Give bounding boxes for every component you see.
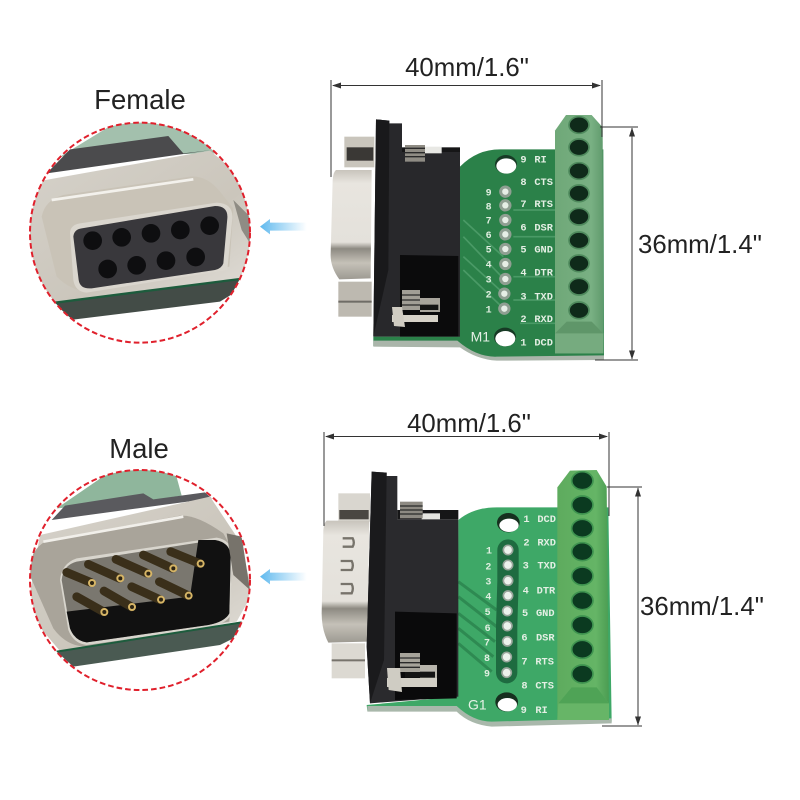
infographic canvas (29, 57, 763, 727)
terminal labels: 3 (520, 291, 527, 303)
screws and bracket (392, 145, 440, 327)
terminal labels: RI (535, 705, 548, 717)
black housing (367, 472, 458, 703)
pad numbers: 8 (484, 653, 490, 664)
terminal labels: 4 (523, 585, 529, 597)
terminal labels: GND (536, 608, 555, 620)
terminal labels: DSR (536, 632, 555, 644)
male breakout connector (322, 470, 612, 727)
solder pad strip (502, 545, 513, 677)
terminal labels (521, 514, 556, 717)
dimension: bottom width 40mm/1.6": 40mm/1.6" (407, 410, 531, 438)
terminal labels: 5 (522, 608, 528, 620)
terminal labels: DSR (534, 222, 554, 234)
terminal labels (520, 155, 554, 349)
dimension: bottom height 36mm/1.4" (602, 487, 764, 726)
terminal labels: 5 (520, 245, 527, 257)
pad numbers: 1 (486, 304, 492, 315)
terminal labels: 2 (523, 537, 530, 549)
terminal labels: 9 (521, 705, 527, 717)
terminal labels: CTS (535, 681, 554, 693)
terminal block (557, 470, 609, 720)
dimension: bottom height 36mm/1.4": 36mm/1.4" (640, 593, 764, 621)
terminal labels: CTS (534, 177, 553, 189)
pad numbers: 9 (486, 187, 492, 198)
pcb: male board (367, 507, 612, 726)
black housing (373, 119, 460, 337)
pad numbers: 5 (486, 245, 492, 256)
d-sub shell (331, 170, 372, 279)
d-sub shell with pins (322, 521, 369, 643)
pad numbers: 3 (486, 275, 492, 286)
pad numbers: 8 (486, 201, 492, 212)
pad numbers: 7 (486, 216, 492, 227)
screws and bracket (387, 502, 437, 692)
female breakout connector (331, 115, 604, 361)
terminal labels: GND (534, 245, 553, 257)
pad numbers: 6 (485, 623, 491, 634)
heading: Female: Female (94, 84, 186, 115)
dimension: bottom width 40mm/1.6" (324, 410, 609, 526)
pad numbers: 7 (484, 638, 490, 649)
nuts (338, 137, 374, 317)
dimension: top width 40mm/1.6": 40mm/1.6" (405, 54, 529, 82)
pad numbers: 3 (485, 576, 491, 587)
terminal labels: 4 (520, 267, 527, 279)
dimension: top height 36mm/1.4": 36mm/1.4" (638, 231, 762, 259)
pad numbers: 2 (486, 289, 492, 300)
board mark G1: G1 (468, 696, 487, 712)
terminal labels: RXD (534, 314, 553, 326)
terminal labels: DTR (534, 267, 554, 279)
mounting holes (494, 155, 517, 346)
terminal labels: 1 (520, 337, 527, 349)
dimension: top width 40mm/1.6" (331, 54, 602, 177)
terminal labels: TXD (537, 561, 556, 573)
terminal labels: 7 (520, 199, 527, 211)
pad numbers: 4 (485, 592, 491, 603)
pad numbers: 5 (485, 607, 491, 618)
heading: Male: Male (109, 433, 169, 464)
pcb: female board (373, 149, 604, 360)
arrow: pointing to male close-up (260, 569, 307, 584)
terminal labels: 2 (520, 314, 527, 326)
pad numbers (484, 546, 492, 680)
terminal labels: DTR (537, 585, 556, 597)
nuts (332, 493, 370, 678)
pad numbers: 1 (486, 546, 492, 557)
callout: female port close-up (20, 120, 260, 347)
terminal labels: DCD (537, 514, 556, 526)
pad numbers: 4 (486, 259, 492, 270)
pad numbers: 2 (485, 561, 491, 572)
arrow: pointing to female close-up (260, 219, 307, 234)
pad numbers (486, 187, 492, 315)
terminal labels: 6 (521, 632, 528, 644)
terminal labels: 1 (523, 514, 530, 526)
pad numbers: 9 (484, 669, 490, 680)
terminal labels: RI (534, 155, 547, 167)
terminal labels: RXD (537, 537, 556, 549)
terminal labels: 3 (523, 561, 529, 573)
terminal labels: DCD (534, 337, 553, 349)
terminal labels: RTS (534, 199, 553, 211)
pcb traces (458, 582, 497, 672)
terminal labels: RTS (535, 656, 554, 668)
terminal labels: 9 (520, 155, 527, 167)
terminal labels: 8 (521, 681, 528, 693)
board mark M1: M1 (471, 329, 490, 345)
pad numbers: 6 (486, 230, 492, 241)
solder pads (500, 187, 510, 313)
callout: male port close-up (20, 465, 260, 692)
terminal labels: 8 (520, 177, 527, 189)
terminal block (555, 115, 603, 353)
mounting holes (495, 513, 520, 712)
terminal labels: 6 (520, 222, 527, 234)
terminal labels: 7 (521, 656, 528, 668)
dimension: top height 36mm/1.4" (595, 127, 762, 360)
terminal labels: TXD (534, 291, 553, 303)
pcb traces (463, 210, 555, 323)
